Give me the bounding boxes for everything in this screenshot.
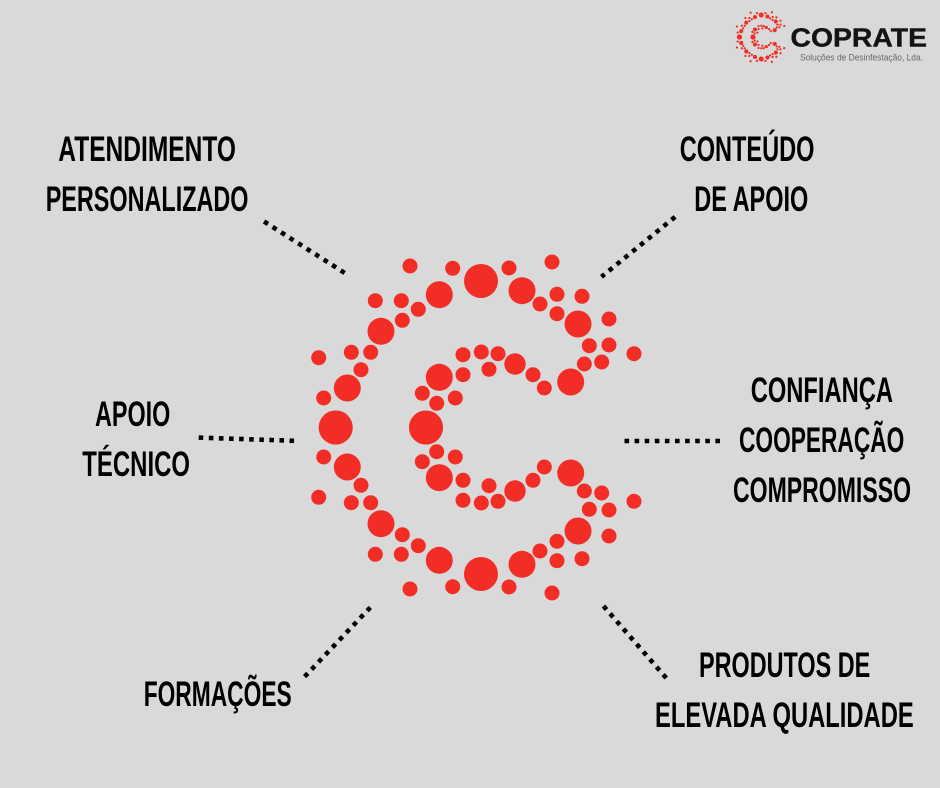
label: atendimento personalizado: ATENDIMENTO [58,130,236,169]
label: atendimento personalizado: PERSONALIZADO [46,180,249,219]
label: conteudo de apoio: DE APOIO [694,180,808,219]
label: atendimento personalizado [46,130,249,219]
logo icon [736,11,785,63]
label: apoio tecnico: TÉCNICO [82,444,190,484]
logo tagline: Soluções de Desinfestação, Lda. [800,52,923,62]
dotted connector: produtos [604,606,666,678]
logo wordmark: COPRATE [790,23,927,53]
dotted connector: conteudo de apoio [602,217,675,277]
dotted connector: apoio tecnico [199,438,294,441]
label: conteudo de apoio: CONTEÚDO [680,129,814,169]
dotted connector: formacoes [305,607,370,677]
label: produtos de elevada qualidade [655,646,914,735]
dotted connector: confianca [624,439,721,443]
dotted connector: atendimento personalizado [264,222,345,273]
company logo [736,11,927,63]
label: apoio tecnico: APOIO [95,395,170,434]
label: confianca cooperacao compromisso [733,371,911,510]
label: apoio tecnico [82,395,190,484]
label: conteudo de apoio [680,129,814,219]
label: formacoes: FORMAÇÕES [144,674,292,714]
central red dotted C mark [311,254,642,600]
